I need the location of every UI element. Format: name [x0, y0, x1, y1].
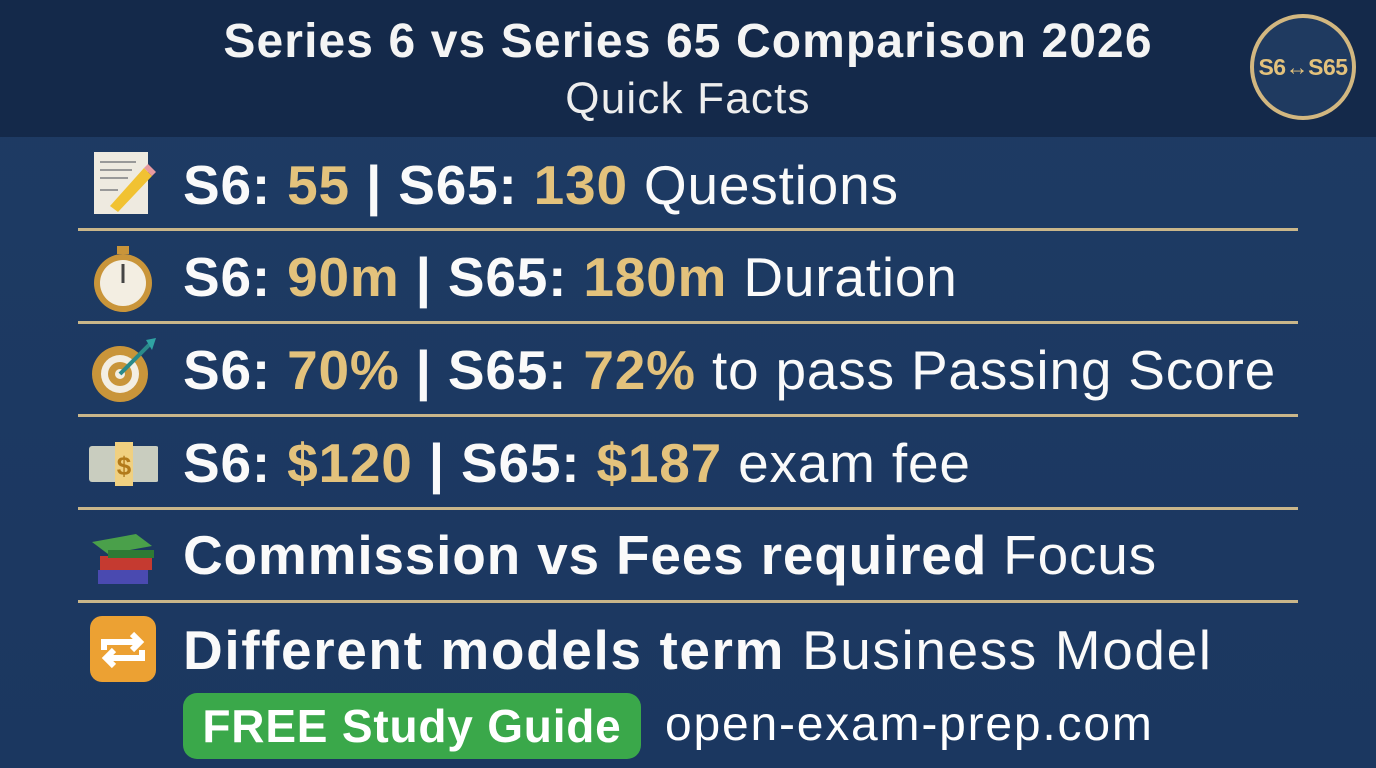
badge: S6↔S65: S6↔S65 [1258, 54, 1348, 80]
subtitle: Quick Facts [565, 74, 811, 123]
icon: books [92, 534, 154, 584]
icon: stopwatch [94, 246, 152, 312]
row 4: fee: S6: $120 | S65: $187 exam fee [183, 432, 971, 494]
row 5: focus: Commission vs Fees required Focus [183, 524, 1157, 586]
row 6: business model: Different models term Business Model [183, 619, 1213, 681]
row 2: duration: S6: 90m | S65: 180m Duration [183, 246, 958, 308]
badge: S6↔S65 [1250, 14, 1356, 120]
title: Series 6 vs Series 65 Comparison 2026 [223, 15, 1153, 68]
icon: repeat [90, 616, 156, 682]
row 1: questions: S6: 55 | S65: 130 Questions [183, 154, 899, 216]
footer: url: open-exam-prep.com [665, 698, 1154, 751]
icon: memo [94, 152, 156, 214]
footer: study guide button: FREE Study Guide [202, 700, 622, 752]
header bar [0, 0, 1376, 137]
row 3: passing score: S6: 70% | S65: 72% to pass Passing Score [183, 339, 1276, 401]
icon: target [92, 338, 156, 402]
icon: money [89, 442, 158, 486]
icon: money: $ [117, 451, 132, 481]
